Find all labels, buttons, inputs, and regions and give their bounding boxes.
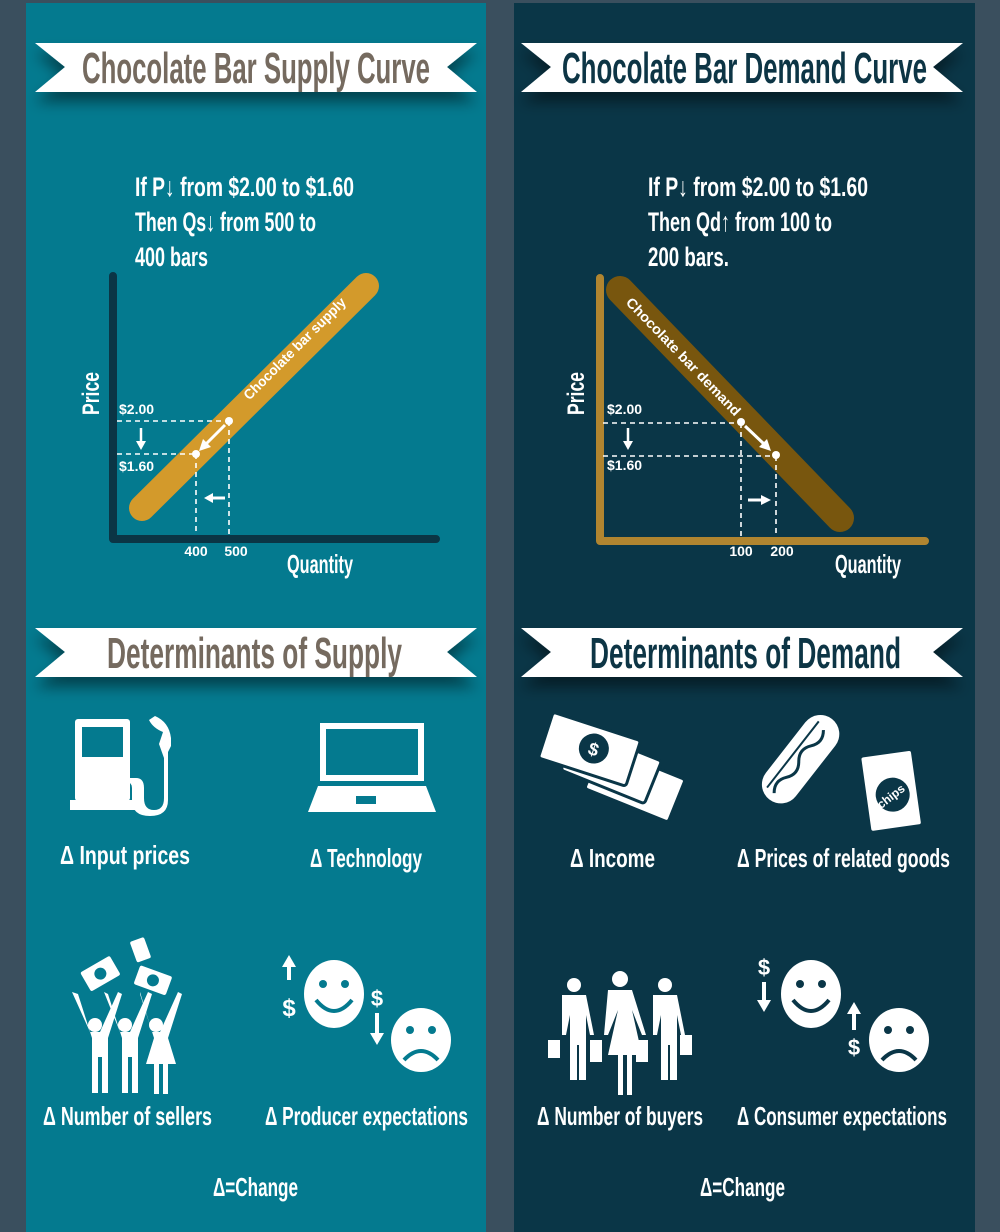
chart: demand curve: Price (563, 372, 590, 415)
label: producer expectations: Δ Producer expectations (265, 1101, 468, 1131)
text: demand explanation: If P↓ from $2.00 to $1.60 (648, 172, 868, 202)
label: technology: Δ Technology (310, 843, 422, 873)
text: demand explanation (648, 172, 868, 272)
text: supply explanation: Then Qs↓ from 500 to (135, 207, 316, 237)
icon: shoppers (548, 971, 692, 1095)
chart: demand curve: Quantity (835, 549, 901, 579)
icon: money stack: $ (586, 738, 601, 761)
text: supply explanation (135, 172, 354, 272)
icon: cheering sellers with money (72, 937, 182, 1094)
chart: supply curve: Quantity (287, 549, 353, 579)
text: demand explanation: Then Qd↑ from 100 to (648, 207, 832, 237)
chart: demand curve: 200 (770, 543, 794, 559)
icon: consumer expectations: $ (758, 955, 770, 980)
icon: hot dog and chips: chips (874, 781, 908, 812)
icon: producer expectations: $ (371, 986, 383, 1011)
label: number of sellers: Δ Number of sellers (43, 1101, 212, 1131)
icon: money stack: $ (600, 754, 617, 776)
panel: supply (26, 3, 486, 1232)
banner: supply curve title (35, 43, 477, 93)
chart: demand curve (563, 278, 925, 579)
chart: supply curve: Chocolate bar supply (240, 294, 349, 403)
text: supply explanation: If P↓ from $2.00 to $1.60 (135, 172, 354, 202)
label: income: Δ Income (570, 843, 655, 873)
chart: demand curve: 100 (729, 543, 753, 559)
icon: gas pump (70, 716, 171, 816)
chart: demand curve: Chocolate bar demand (623, 294, 744, 419)
chart: demand curve: $2.00 (607, 401, 642, 417)
panel: demand (514, 3, 975, 1232)
chart: supply curve: 500 (224, 543, 248, 559)
banner: determinants of supply (35, 628, 477, 678)
chart: supply curve: 400 (184, 543, 208, 559)
icon: hot dog and chips (754, 707, 921, 831)
label: number of buyers: Δ Number of buyers (537, 1101, 703, 1131)
banner: supply curve title: Chocolate Bar Supply Curve (82, 44, 430, 93)
text: demand explanation: 200 bars. (648, 242, 729, 272)
icon: laptop (308, 723, 436, 812)
chart: supply curve: Price (78, 372, 105, 415)
label: input prices: Δ Input prices (60, 840, 190, 870)
chart: supply curve (78, 276, 436, 579)
icon: producer expectations (282, 955, 451, 1072)
icon: money stack (538, 712, 685, 822)
icon: producer expectations: $ (282, 995, 296, 1022)
footnote: demand legend: Δ=Change (700, 1172, 785, 1202)
icon: consumer expectations: $ (848, 1035, 860, 1060)
footnote: supply legend: Δ=Change (213, 1172, 298, 1202)
text: supply explanation: 400 bars (135, 242, 208, 272)
chart: demand curve: $1.60 (607, 457, 642, 473)
chart: supply curve: $1.60 (119, 458, 154, 474)
icon: money stack: $ (624, 773, 640, 794)
chart: supply curve: $2.00 (119, 401, 154, 417)
banner: determinants of supply: Determinants of Supply (107, 629, 402, 678)
icon: consumer expectations (757, 955, 929, 1072)
